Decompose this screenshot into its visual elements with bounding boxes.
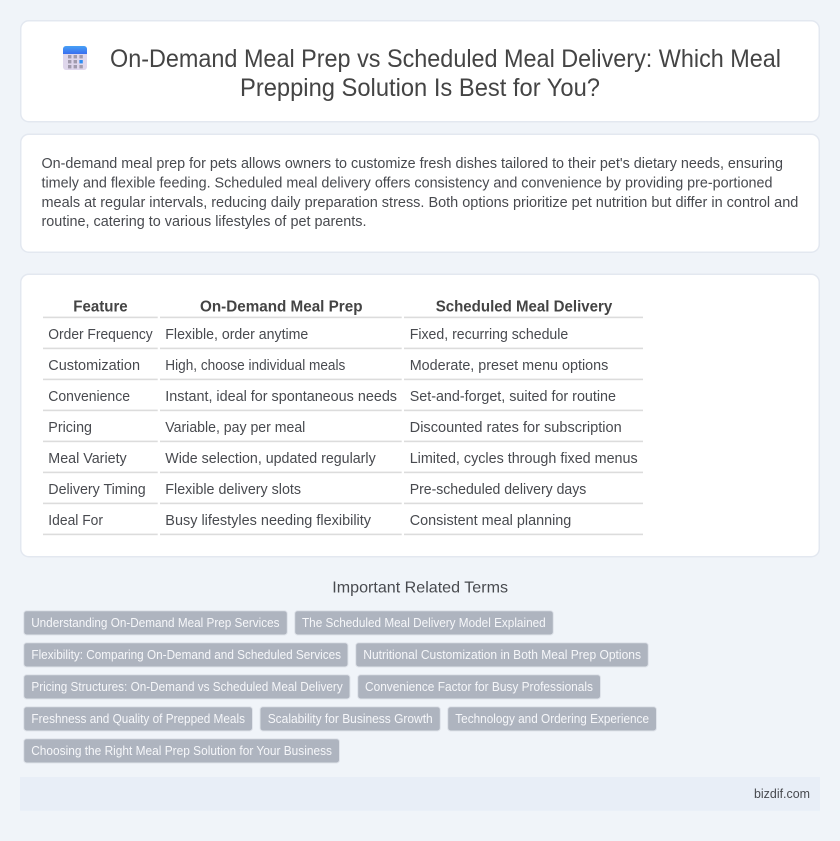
tag: freshness and quality: Freshness and Quality of Prepped Meals [31,712,245,726]
row: delivery timing: Flexible delivery slots [165,482,301,498]
panel: title header [21,21,819,122]
tag: scalability [260,707,440,731]
tag: choosing the right solution: Choosing the Right Meal Prep Solution for Your Business [31,744,332,758]
table header row: Feature [73,299,128,316]
title: On-Demand Meal Prep vs Scheduled Meal Delivery: Which Meal [110,45,781,73]
table header row: Scheduled Meal Delivery [436,299,613,316]
icon: calendar [63,46,87,70]
tag: technology: Technology and Ordering Experience [455,712,649,726]
tag: scalability: Scalability for Business Growth [268,712,433,726]
row: ideal for: Ideal For [48,513,103,529]
row: customization [43,358,643,380]
row: ideal for: Busy lifestyles needing flexibility [165,513,372,529]
tag: pricing structures [24,675,350,699]
footer bar: bizdif.com [754,786,810,801]
row: pricing: Variable, pay per meal [165,420,305,436]
row: convenience: Set-and-forget, suited for routine [410,389,616,405]
row: convenience [43,389,643,411]
panel: intro paragraph [21,134,819,252]
tag: understanding on-demand: Understanding On-Demand Meal Prep Services [31,616,280,630]
tag cloud: related terms [24,611,656,763]
row: meal variety: Meal Variety [48,451,127,467]
tag: flexibility [24,643,348,667]
row: meal variety: Limited, cycles through fixed menus [410,451,638,467]
tag: nutritional customization: Nutritional Customization in Both Meal Prep Options [363,648,641,662]
tag: nutritional customization [356,643,648,667]
tag: pricing structures: Pricing Structures: On-Demand vs Scheduled Meal Delivery [31,680,343,694]
tag: technology [448,707,656,731]
title [110,45,781,102]
tag: choosing the right solution [24,739,339,763]
tag: freshness and quality [24,707,253,731]
panel: comparison table [21,274,819,557]
row: meal variety: Wide selection, updated regularly [165,451,376,467]
row: customization: High, choose individual meals [165,358,345,374]
heading: important related terms: Important Related Terms [332,580,508,597]
tag: convenience factor: Convenience Factor for Busy Professionals [365,680,593,694]
row: ideal for [43,513,643,535]
row: pricing: Discounted rates for subscription [410,420,622,436]
panel: intro paragraph: routine, catering to various lifestyles of pet parents. [42,214,366,230]
row: delivery timing [43,482,643,504]
panel: intro paragraph: meals at regular intervals, reducing daily preparation stress. Both options prioritize pet nutrition but differ in control and [42,195,798,211]
tag: understanding on-demand [24,611,287,635]
row: order frequency: Flexible, order anytime [165,327,308,343]
panel: intro paragraph: timely and flexible feeding. Scheduled meal delivery offers consistency and convenience by providing pre-portioned [42,176,772,192]
panel: intro paragraph: On-demand meal prep for pets allows owners to customize fresh dishes tailored to their pet's dietary needs, ensuring [42,156,783,172]
row: delivery timing: Delivery Timing [48,482,146,498]
tag: flexibility: Flexibility: Comparing On-Demand and Scheduled Services [31,648,341,662]
row: delivery timing: Pre-scheduled delivery days [410,482,586,498]
tag: scheduled model: The Scheduled Meal Delivery Model Explained [302,616,546,630]
row: meal variety [43,451,643,473]
row: order frequency: Fixed, recurring schedule [410,327,568,343]
row: pricing [43,420,643,442]
row: order frequency [43,327,643,349]
row: customization: Moderate, preset menu options [410,358,608,374]
row: pricing: Pricing [48,420,92,436]
title: Prepping Solution Is Best for You? [240,74,600,102]
row: customization: Customization [48,358,140,374]
row: order frequency: Order Frequency [48,327,153,343]
tag: scheduled model [295,611,553,635]
row: convenience: Convenience [48,389,130,405]
table header row [43,299,643,318]
table header row: On-Demand Meal Prep [200,299,362,316]
tag: convenience factor [358,675,600,699]
row: ideal for: Consistent meal planning [410,513,571,529]
footer bar [20,777,820,811]
row: convenience: Instant, ideal for spontaneous needs [165,389,397,405]
